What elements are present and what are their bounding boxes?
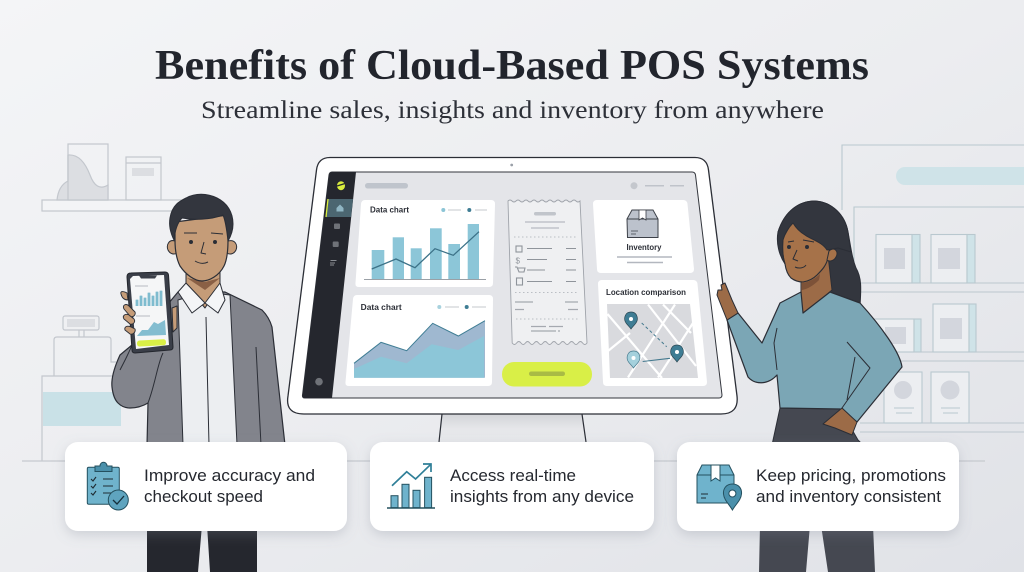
panel: receipt (508, 200, 587, 344)
trousers (772, 408, 863, 445)
right background: shelving unit (842, 145, 1024, 432)
stand edges (439, 414, 586, 442)
neck shadow (187, 278, 220, 290)
facial features (184, 233, 223, 263)
panel: inventory (593, 200, 694, 273)
map (607, 304, 698, 378)
ears (167, 241, 237, 254)
hair back and ponytail (778, 201, 861, 306)
collar (178, 283, 225, 313)
panel: inventory: Inventory (626, 243, 662, 252)
fingers (121, 292, 135, 334)
neck (801, 255, 832, 315)
title: Benefits of Cloud-Based POS Systems (155, 43, 869, 89)
panel: area chart (345, 295, 493, 386)
sweater (727, 292, 902, 422)
person: woman (717, 201, 902, 572)
legs (147, 525, 257, 572)
text: Keep pricing, promotions (756, 466, 946, 485)
card: consistent pricing (677, 442, 959, 531)
facial features (788, 240, 814, 268)
icon: rising bar chart (387, 464, 435, 508)
hand (172, 306, 177, 332)
shirt placket and jacket seams (120, 317, 261, 445)
subtitle: Streamline sales, insights and inventory from anywhere (201, 95, 824, 124)
button (502, 362, 592, 386)
shirt (178, 292, 237, 445)
panel: receipt: $ (516, 256, 520, 266)
left background: shelf and cash register (42, 144, 182, 461)
card: real-time insights (370, 442, 654, 531)
tablet stand (439, 414, 587, 444)
text: and inventory consistent (756, 487, 941, 506)
hand on tablet (717, 283, 738, 320)
hair cap (777, 201, 851, 264)
ear (827, 249, 837, 261)
icon: package box (627, 210, 658, 238)
screen (302, 172, 722, 398)
sweater seams (774, 328, 870, 408)
panel: area chart: Data chart (361, 303, 402, 312)
icon: clipboard with check (87, 462, 128, 510)
card: accuracy and speed (65, 442, 347, 531)
text: Improve accuracy and (144, 466, 315, 485)
text: checkout speed (144, 487, 263, 506)
sidebar (302, 172, 356, 398)
face (175, 215, 228, 281)
camera (510, 164, 513, 166)
hair (170, 194, 233, 241)
woman legs (759, 525, 875, 572)
jacket (112, 292, 285, 445)
top bar (365, 182, 684, 189)
panel: bar and line chart: Data chart (370, 206, 409, 215)
floor line (22, 460, 985, 462)
tablet (288, 158, 737, 414)
text: Access real-time (450, 466, 576, 485)
hand on hip (823, 408, 857, 435)
neck (186, 270, 220, 308)
text: insights from any device (450, 487, 634, 506)
face (783, 222, 830, 282)
panel: location comparison: Location comparison (606, 288, 686, 297)
icon: map pins (625, 312, 683, 368)
panel: location comparison (598, 280, 707, 386)
icon: box with location pin (697, 465, 742, 510)
phone (127, 272, 173, 353)
chin shadow (802, 274, 820, 290)
person: man with phone (112, 194, 285, 572)
panel: bar and line chart (355, 200, 495, 287)
tablet frame (288, 158, 737, 414)
